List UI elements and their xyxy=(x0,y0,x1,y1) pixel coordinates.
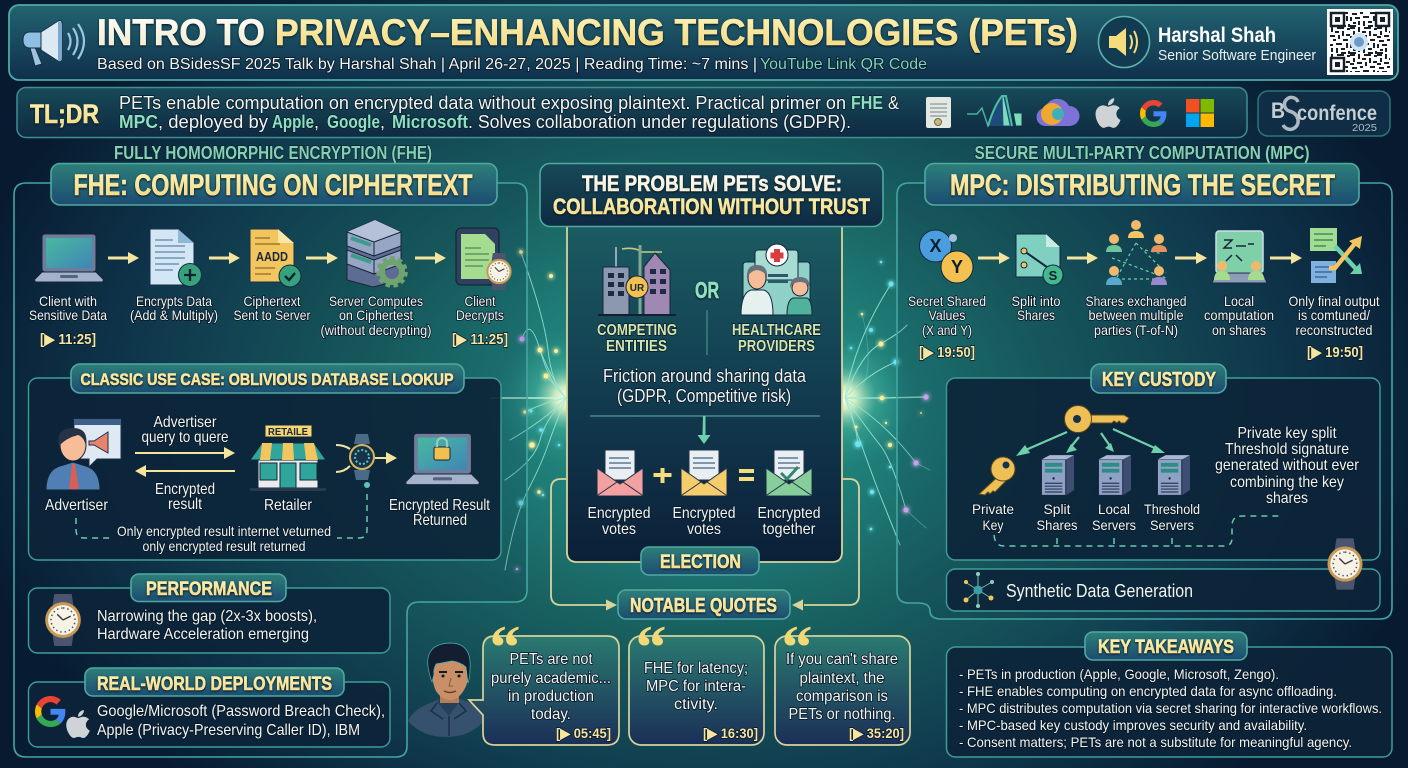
step labels: FHE: (Add & Multiply) xyxy=(130,307,218,323)
summary text: , deployed by xyxy=(158,112,268,132)
query label: Advertiser xyxy=(154,414,217,431)
icon: speaker xyxy=(1098,16,1150,68)
icon: watch xyxy=(45,594,81,646)
arrow xyxy=(1067,252,1098,264)
takeaway list xyxy=(959,666,1382,750)
step labels: MPC: between multiple xyxy=(1088,307,1184,323)
heading: notable quotes: NOTABLE QUOTES xyxy=(630,595,777,617)
subtitle: YouTube Link QR Code xyxy=(760,56,927,73)
step labels: FHE: Decrypts xyxy=(456,307,504,323)
arrow: down xyxy=(698,416,710,444)
performance text xyxy=(97,608,317,643)
quote text: MPC for intera- xyxy=(646,678,746,695)
step labels: MPC: [▶ 19:50] xyxy=(919,344,975,361)
envelope labels: votes xyxy=(687,521,721,538)
step: client decrypts xyxy=(456,228,512,290)
envelope labels: together xyxy=(762,521,816,538)
icon: split document xyxy=(1016,234,1063,285)
panel: key takeaways xyxy=(946,632,1392,757)
icon: advertiser xyxy=(46,419,121,490)
heading: performance: PERFORMANCE xyxy=(146,579,272,600)
icon: watch xyxy=(1327,538,1363,590)
section label: FHE: FULLY HOMOMORPHIC ENCRYPTION (FHE) xyxy=(114,143,432,163)
step labels: MPC: computation xyxy=(1204,307,1274,323)
heading: MPC xyxy=(925,164,1359,205)
summary text: FHE xyxy=(851,93,883,113)
icon: combined output xyxy=(1310,228,1362,283)
plus sign xyxy=(654,468,672,483)
step labels: FHE xyxy=(29,293,508,348)
conference wordmark: confence xyxy=(1297,102,1377,125)
step labels: MPC: reconstructed xyxy=(1296,322,1372,338)
step: client laptop xyxy=(35,234,103,282)
summary text: , xyxy=(380,112,385,132)
quote card 1 xyxy=(469,614,619,745)
dashed flow: custody xyxy=(994,516,1360,546)
custody labels: Threshold xyxy=(1144,501,1200,517)
step labels: MPC: Split into xyxy=(1012,293,1061,309)
deployments text xyxy=(97,703,385,739)
icon: data network xyxy=(964,572,994,608)
header banner xyxy=(9,5,1398,80)
title: INTRO TO xyxy=(97,12,265,53)
arrow xyxy=(209,252,240,264)
label: encrypted result returned: Encrypted Result xyxy=(389,497,490,514)
subtitle: Based on BSidesSF 2025 Talk by Harshal Shah | April 26-27, 2025 | Reading Time: ~7 mins | xyxy=(97,56,757,73)
takeaway list: - MPC distributes computation via secret sharing for interactive workflows. xyxy=(959,700,1382,716)
OR label: OR xyxy=(695,277,719,303)
custody labels: Servers xyxy=(1092,517,1136,533)
envelope labels: Encrypted xyxy=(758,505,820,522)
quote text: ctivity. xyxy=(674,696,718,713)
envelope labels: votes xyxy=(602,521,636,538)
custody labels: Shares xyxy=(1036,517,1078,533)
icon: healthcare providers xyxy=(741,244,812,315)
synthetic data label: Synthetic Data Generation xyxy=(1006,581,1193,601)
quote text: today. xyxy=(531,706,571,723)
quote text: FHE for latency; xyxy=(644,660,748,677)
heading: the problem xyxy=(540,164,883,226)
step: ciphertext document xyxy=(250,229,301,287)
custody description: combining the key xyxy=(1230,474,1344,491)
query label xyxy=(142,414,229,446)
quote text xyxy=(786,651,898,723)
performance text: Hardware Acceleration emerging xyxy=(97,626,309,643)
quote mark: “ xyxy=(636,614,666,682)
icon: retailer storefront xyxy=(250,425,326,491)
connector: election to quotes xyxy=(551,479,859,610)
summary text: Microsoft xyxy=(392,112,468,132)
presenter name: Harshal Shah xyxy=(1158,24,1276,47)
quote text: in production xyxy=(508,688,594,705)
note: encrypted result: only encrypted result returned xyxy=(142,538,306,554)
equals sign xyxy=(739,469,754,481)
step labels: FHE: Sent to Server xyxy=(234,307,311,323)
custody description: shares xyxy=(1266,490,1308,507)
quote text: If you can't share xyxy=(786,651,898,668)
energy burst: left xyxy=(490,250,636,570)
step: encrypt document xyxy=(150,229,202,286)
heading: key custody xyxy=(1091,364,1226,393)
envelope labels: Encrypted xyxy=(588,505,650,522)
summary text: Google xyxy=(327,112,380,132)
heading: FHE xyxy=(51,164,497,205)
custody labels: Private xyxy=(972,501,1014,517)
panel: MPC xyxy=(897,164,1392,619)
query label: query to quere xyxy=(142,429,229,446)
heading: deployments: REAL-WORLD DEPLOYMENTS xyxy=(97,674,332,695)
heading: the problem: COLLABORATION WITHOUT TRUST xyxy=(553,194,870,219)
quote card 3 xyxy=(775,614,910,745)
label: retailer: Retailer xyxy=(264,497,313,514)
result label: result xyxy=(168,496,202,513)
icon: X and Y values: X xyxy=(929,236,942,256)
step labels: MPC: is comtuned/ xyxy=(1298,307,1370,323)
quote card 2 xyxy=(629,614,764,745)
quote text: comparison is xyxy=(796,688,888,705)
heading: classic use case: CLASSIC USE CASE: OBLIVIOUS DATABASE LOOKUP xyxy=(80,370,454,389)
label: healthcare providers: HEALTHCARE xyxy=(732,322,821,339)
deployments text: Apple (Privacy-Preserving Caller ID), IBM xyxy=(97,722,360,739)
quote text: plaintext, the xyxy=(800,670,885,687)
icon: envelope green xyxy=(766,450,812,496)
sub-panel: classic use case xyxy=(28,364,501,560)
icon: local computation xyxy=(1212,231,1267,283)
friction text xyxy=(603,366,807,406)
step labels: MPC: parties (T-of-N) xyxy=(1094,322,1178,338)
arrow xyxy=(415,252,446,264)
presenter name xyxy=(1158,24,1316,64)
custody description: generated without ever xyxy=(1215,457,1360,474)
custody labels: Servers xyxy=(1150,517,1194,533)
step labels: FHE: Client with xyxy=(39,293,97,309)
step labels: MPC: Secret Shared xyxy=(908,293,986,309)
dashed flow: right xyxy=(337,482,370,538)
arrow xyxy=(306,252,338,264)
quote text xyxy=(644,660,748,713)
heading: election: ELECTION xyxy=(660,552,741,573)
custody labels: Split xyxy=(1044,501,1071,517)
step labels: FHE: Client xyxy=(464,293,496,309)
quote text: PETs are not xyxy=(510,651,593,668)
summary text: & xyxy=(888,93,899,113)
custody description xyxy=(1215,425,1360,507)
conference year: 2025 xyxy=(1352,123,1377,134)
heading: key takeaways xyxy=(1085,632,1247,660)
icon: Microsoft xyxy=(1186,99,1214,127)
icon: master key xyxy=(1064,406,1129,432)
step labels: MPC xyxy=(908,293,1380,361)
arrow: query xyxy=(135,447,235,459)
icon: split document: S xyxy=(1049,268,1058,283)
icon: Apple xyxy=(66,710,90,738)
icon: megaphone xyxy=(23,20,84,66)
heading: notable quotes xyxy=(618,590,790,619)
quote text xyxy=(491,651,611,723)
custody labels xyxy=(972,501,1200,533)
summary text: Apple xyxy=(272,112,314,132)
arrow: to result xyxy=(375,452,397,464)
energy burst: right xyxy=(775,261,930,545)
timestamp: [▶ 05:45] xyxy=(556,725,611,741)
arrow: result xyxy=(135,465,235,477)
heading: classic use case xyxy=(71,364,464,393)
note: encrypted result: Only encrypted result internet veturned xyxy=(117,523,331,539)
arrow xyxy=(1270,252,1302,264)
heading: key takeaways: KEY TAKEAWAYS xyxy=(1098,637,1234,658)
conference badge xyxy=(1258,91,1390,136)
step labels: MPC: Shares exchanged xyxy=(1086,293,1186,309)
heading: key custody: KEY CUSTODY xyxy=(1102,369,1217,391)
summary text: , xyxy=(314,112,319,132)
step labels: FHE: Ciphertext xyxy=(244,293,301,309)
icon: certificate xyxy=(926,97,951,128)
speaker portrait xyxy=(408,643,484,737)
icon: X and Y values xyxy=(920,230,973,283)
sub-panel: synthetic data xyxy=(946,569,1380,611)
icon: Apple xyxy=(1096,98,1121,128)
icon: competing buildings xyxy=(598,245,676,315)
step: server with gear xyxy=(347,220,406,287)
step labels: MPC: Shares xyxy=(1017,307,1055,323)
step labels: MPC: [▶ 19:50] xyxy=(1307,344,1363,361)
label: advertiser: Advertiser xyxy=(45,497,109,514)
label: healthcare providers: PROVIDERS xyxy=(738,338,815,355)
title: PRIVACY–ENHANCING TECHNOLOGIES (PETs) xyxy=(275,12,1078,53)
arrows: key split xyxy=(1016,429,1165,456)
summary text: MPC xyxy=(119,112,158,132)
heading: the problem: THE PROBLEM PETs SOLVE: xyxy=(582,171,842,196)
sub-panel: key custody xyxy=(946,364,1380,560)
timestamp: [▶ 16:30] xyxy=(703,725,758,741)
performance text: Narrowing the gap (2x-3x boosts), xyxy=(97,608,317,625)
takeaway list: - PETs in production (Apple, Google, Microsoft, Zengo). xyxy=(959,666,1279,682)
step labels: FHE: Sensitive Data xyxy=(29,307,107,323)
icon: retailer storefront: RETAILE xyxy=(268,427,308,438)
result label xyxy=(155,481,215,513)
dashed flow: left xyxy=(76,518,110,538)
summary text: . Solves collaboration under regulations (GDPR). xyxy=(468,112,851,132)
step labels: FHE: [▶ 11:25] xyxy=(452,331,508,348)
icon: locked laptop xyxy=(406,433,479,485)
takeaway list: - MPC-based key custody improves security and availability. xyxy=(959,717,1307,733)
arrow xyxy=(1175,252,1207,264)
BSides swirl logo: B xyxy=(1271,98,1285,123)
heading: performance xyxy=(131,574,286,602)
friction text: (GDPR, Competitive risk) xyxy=(617,386,791,406)
step labels: MPC: Values xyxy=(928,307,966,323)
quote mark: “ xyxy=(782,614,812,682)
sub-panel: real-world deployments xyxy=(28,668,390,747)
quote text: purely academic... xyxy=(491,670,611,687)
friction text: Friction around sharing data xyxy=(603,366,807,386)
icon: analytics logo xyxy=(967,96,1021,126)
icon: parties network xyxy=(1106,220,1167,285)
icon: watch with connectors xyxy=(336,434,374,480)
arrow xyxy=(108,252,139,264)
step: ciphertext document: AADD xyxy=(256,249,288,264)
heading: FHE: FHE: COMPUTING ON CIPHERTEXT xyxy=(74,169,472,202)
custody labels: Key xyxy=(982,517,1004,533)
presenter name: Senior Software Engineer xyxy=(1158,47,1316,64)
step labels: MPC: Local xyxy=(1224,293,1254,309)
icon: envelope red xyxy=(597,450,643,496)
panel: the problem PETs solve xyxy=(540,164,883,575)
icon: private key xyxy=(979,457,1015,495)
custody description: Private key split xyxy=(1238,425,1337,442)
quote mark: “ xyxy=(490,614,520,682)
panel: FHE xyxy=(14,164,527,757)
label: competing entities xyxy=(597,322,677,355)
summary text xyxy=(119,93,899,132)
step labels: FHE: on Ciphertest xyxy=(339,307,413,323)
label: healthcare providers xyxy=(732,322,821,355)
heading: deployments xyxy=(85,668,344,696)
step labels: MPC: (X and Y) xyxy=(922,322,972,338)
step labels: FHE: Server Computes xyxy=(329,293,423,309)
label: competing entities: COMPETING xyxy=(597,322,677,339)
step labels: FHE: Encrypts Data xyxy=(136,293,212,309)
label: encrypted result returned: Returned xyxy=(413,512,467,529)
envelope labels xyxy=(588,505,820,538)
deployments text: Google/Microsoft (Password Breach Check), xyxy=(97,703,385,720)
summary text: PETs enable computation on encrypted data without exposing plaintext. Practical primer on xyxy=(119,93,846,113)
result label: Encrypted xyxy=(155,481,215,498)
icon: competing buildings: UR xyxy=(630,283,645,294)
step labels: MPC: on shares xyxy=(1212,322,1266,338)
icon: Google xyxy=(1140,100,1166,127)
icons: servers xyxy=(1041,455,1190,496)
quote text: PETs or nothing. xyxy=(788,706,896,723)
QR code xyxy=(1327,9,1393,75)
sub-panel: performance xyxy=(28,574,390,653)
heading: election xyxy=(641,547,759,575)
icon: cloud xyxy=(1036,99,1080,126)
label: competing entities: ENTITIES xyxy=(606,338,667,355)
custody labels: Local xyxy=(1098,501,1130,517)
arrow xyxy=(978,252,1010,264)
icon: Google xyxy=(35,696,65,727)
section label: MPC: SECURE MULTI-PARTY COMPUTATION (MPC) xyxy=(974,143,1310,163)
TL;DR panel xyxy=(17,88,1247,138)
custody description: Threshold signature xyxy=(1225,441,1349,458)
TL;DR label: TL;DR xyxy=(30,99,99,129)
timestamp: [▶ 35:20] xyxy=(849,725,904,741)
label: encrypted result returned xyxy=(389,497,490,529)
step labels: FHE: [▶ 11:25] xyxy=(40,331,96,348)
takeaway list: - FHE enables computing on encrypted data for async offloading. xyxy=(959,683,1337,699)
step labels: MPC: Only final output xyxy=(1288,293,1380,309)
icon: envelope yellow xyxy=(681,450,727,496)
icon: X and Y values: Y xyxy=(951,257,963,277)
takeaway list: - Consent matters; PETs are not a substitute for meaningful agency. xyxy=(959,734,1352,750)
note: encrypted result xyxy=(117,523,331,554)
envelope labels: Encrypted xyxy=(672,505,736,522)
step labels: FHE: (without decrypting) xyxy=(320,322,432,338)
